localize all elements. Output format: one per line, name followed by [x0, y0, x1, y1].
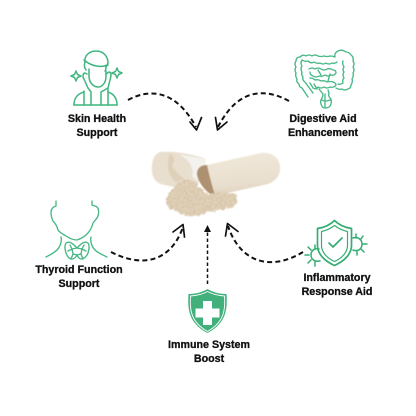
arrow: thyroid to capsule [111, 224, 184, 260]
icon: immune shield [188, 289, 227, 333]
label: inflammatory: Response Aid [302, 286, 372, 298]
label: thyroid: Support [59, 278, 100, 290]
arrow: immune to capsule [204, 225, 211, 284]
label: inflammatory: Inflammatory [303, 272, 371, 284]
icon: inflammatory shield [305, 220, 367, 266]
right filled capsule half [197, 153, 280, 196]
label: digestive: Digestive Aid [289, 113, 357, 125]
label: digestive: Enhancement [288, 127, 358, 139]
label: skin health: Skin Health [68, 113, 126, 125]
label: thyroid: Thyroid Function [35, 264, 123, 276]
icon: digestive intestine [295, 50, 354, 108]
icon: skin health face [71, 51, 122, 105]
label: skin health: Support [77, 127, 118, 139]
arrow: skin to capsule [128, 93, 202, 130]
image: open capsule with powder [152, 152, 280, 216]
label: immune: Immune System [168, 339, 250, 351]
arrow: digestive to capsule [216, 93, 289, 130]
powder pile [166, 180, 238, 216]
left clear capsule half [152, 152, 206, 191]
icon: thyroid neck [46, 201, 107, 259]
label: immune: Boost [194, 353, 225, 365]
arrow: inflammatory to capsule [226, 224, 303, 262]
